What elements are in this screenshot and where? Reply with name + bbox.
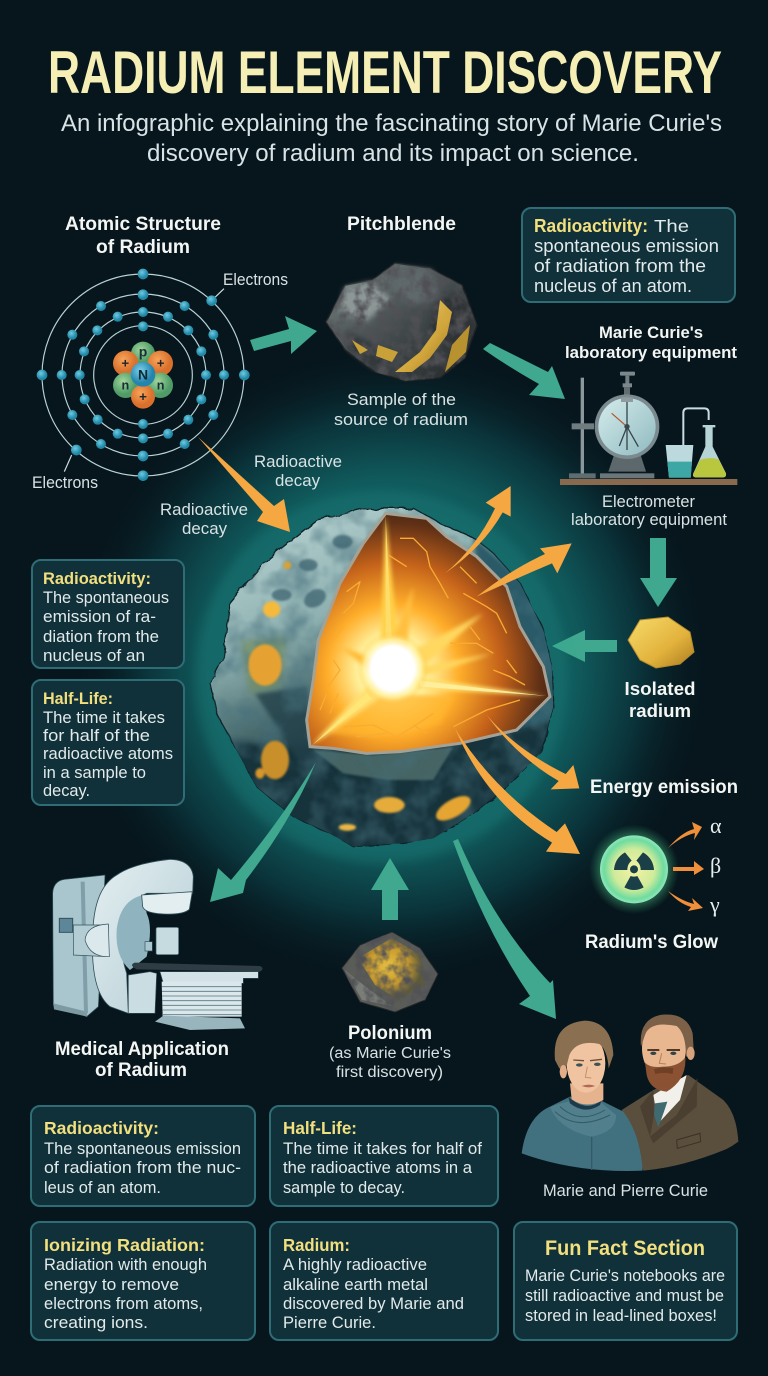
panel: radium definition (270, 1222, 498, 1340)
panel: half-life left: Half-Life: (43, 690, 113, 708)
arrow: lab to isolated radium (640, 538, 677, 607)
label: polonium: (as Marie Curie's (329, 1045, 451, 1062)
label: polonium: first discovery) (336, 1064, 443, 1081)
panel: ionizing radiation: creating ions. (44, 1314, 148, 1332)
panel: radioactivity top right: nucleus of an atom. (534, 276, 692, 296)
label: radium's glow: Radium's Glow (585, 932, 718, 953)
panel: radioactivity left: The spontaneous (43, 589, 169, 607)
arrow: pitchblende to lab (483, 343, 565, 399)
label: energy emission: Energy emission (590, 777, 738, 798)
panel: radium definition: discovered by Marie and (283, 1295, 464, 1313)
label: electrons lower: Electrons (32, 474, 98, 492)
panel: radioactivity top right: of radiation from the (534, 256, 706, 276)
panel: ionizing radiation: Ionizing Radiation: (44, 1235, 205, 1255)
heading: atomic structure: of Radium (96, 237, 190, 258)
panel: radioactivity top right: spontaneous emission (534, 236, 719, 256)
rock body (210, 508, 553, 847)
lava cracks (320, 538, 525, 737)
nucleus: p (139, 344, 147, 360)
caption: marie and pierre curie: Marie and Pierre Curie (543, 1182, 708, 1200)
heading: lab equipment: Marie Curie's (599, 323, 703, 342)
caption: electrometer: Electrometer (602, 493, 696, 511)
icon: pitchblende rock (326, 263, 477, 381)
panel: fun fact: still radioactive and must be (525, 1287, 724, 1305)
cut face (307, 513, 550, 753)
heading: medical application: of Radium (95, 1060, 187, 1081)
label: isolated radium: radium (629, 701, 691, 721)
arrow: rock to medical (210, 762, 316, 902)
pits on rock surface (272, 535, 353, 611)
panel: ionizing radiation: electrons from atoms, (44, 1295, 203, 1313)
panel: radium definition: Pierre Curie. (283, 1314, 376, 1332)
panel: fun fact: stored in lead-lined boxes! (525, 1307, 717, 1325)
panel: radium definition: alkaline earth metal (283, 1276, 428, 1294)
nucleus (113, 342, 173, 409)
panel: radium definition: A highly radioactive (283, 1256, 427, 1274)
label: alpha: α (710, 813, 722, 838)
electrons (37, 269, 250, 481)
panel: half-life bottom: the radioactive atoms in a (283, 1159, 473, 1177)
label: radioactive decay lower: decay (182, 520, 228, 538)
panel: radioactivity left: diation from the (43, 628, 159, 646)
icon: isolated radium nugget (628, 617, 694, 668)
arrow: atom to pitchblende (250, 316, 317, 354)
panel: fun fact: Fun Fact Section (545, 1237, 705, 1260)
caption: pitchblende: Sample of the (347, 391, 456, 409)
label: polonium: Polonium (348, 1023, 432, 1044)
panel: half-life bottom: The time it takes for half of (283, 1140, 482, 1158)
panel: radioactivity bottom (31, 1106, 255, 1206)
caption: pitchblende (334, 391, 468, 429)
icon: radium glow orb (589, 824, 679, 914)
arrow: rock to curies (453, 839, 556, 1019)
label: radioactive decay lower (160, 501, 248, 538)
panel: half-life left: for half of the (43, 727, 150, 745)
nucleus: n (157, 378, 165, 392)
label: polonium (329, 1023, 451, 1081)
icon: polonium rock (342, 932, 438, 1012)
panel: half-life bottom (270, 1106, 498, 1206)
nucleus: + (121, 356, 129, 371)
panel: ionizing radiation: Radiation with enough (44, 1256, 207, 1274)
panel: radioactivity bottom: Radioactivity: (44, 1118, 159, 1138)
panel: half-life left: decay. (43, 782, 90, 800)
heading: pitchblende: Pitchblende (347, 214, 456, 235)
label: beta: β (710, 853, 721, 878)
arrows: alpha beta gamma (668, 822, 704, 911)
subtitle (61, 110, 722, 167)
panel: radioactivity left (32, 560, 184, 668)
nucleus: n (121, 378, 129, 392)
heading: atomic structure: Atomic Structure (65, 214, 221, 235)
panel: half-life bottom: Half-Life: (283, 1118, 357, 1138)
caption: electrometer: laboratory equipment (571, 511, 727, 529)
marie (522, 1021, 643, 1171)
panel: radium definition: Radium: (283, 1235, 350, 1255)
panel: radioactivity bottom: The spontaneous emission (44, 1140, 241, 1158)
label: radioactive decay upper: decay (275, 472, 321, 490)
panel: fun fact: Marie Curie's notebooks are (525, 1267, 725, 1285)
label: isolated radium (624, 679, 696, 721)
panel: radioactivity top right: Radioactivity: (534, 216, 648, 236)
nucleus: + (157, 356, 165, 371)
panel: radioactivity top right: The (654, 216, 689, 236)
caption: pitchblende: source of radium (334, 411, 468, 429)
panel: fun fact (514, 1222, 737, 1340)
panel: radioactivity bottom: of radiation from the nuc- (44, 1159, 241, 1177)
caption: electrometer (571, 493, 727, 529)
nucleus: + (139, 389, 147, 404)
pierre (622, 1015, 738, 1171)
panel: ionizing radiation: energy to remove (44, 1276, 179, 1294)
panel: radioactivity left: Radioactivity: (43, 570, 151, 588)
arrows: orange radiation from rock (445, 486, 580, 854)
arrow: polonium to rock (371, 858, 409, 920)
arrow: atom decay into rock (198, 437, 290, 532)
label: radioactive decay lower: Radioactive (160, 501, 248, 519)
illustration: marie and pierre curie portrait (517, 1015, 743, 1187)
label: radioactive decay upper: Radioactive (254, 453, 342, 471)
panel: radioactivity bottom: leus of an atom. (44, 1179, 161, 1197)
label: radioactive decay upper (254, 453, 342, 490)
panel: ionizing radiation (31, 1222, 255, 1340)
arrow: radium to rock (552, 630, 617, 662)
panel: radioactivity top right (522, 208, 735, 302)
nucleus: N (138, 366, 148, 382)
heading: atomic structure (65, 214, 221, 258)
heading: lab equipment (565, 323, 737, 362)
illustration: laboratory equipment (560, 372, 737, 485)
heading: medical application: Medical Application (55, 1039, 229, 1060)
panel: radioactivity left: nucleus of an (43, 647, 145, 665)
subtitle: An infographic explaining the fascinating story of Marie Curie's (61, 110, 722, 137)
panel: half-life left: The time it takes (43, 709, 165, 727)
panel: half-life left: in a sample to (43, 764, 146, 782)
diagram: radium atom (37, 269, 250, 481)
heading: lab equipment: laboratory equipment (565, 343, 737, 362)
central teal glow (40, 320, 750, 1010)
label: gamma: γ (709, 892, 720, 917)
panel: half-life left (32, 680, 184, 805)
label: isolated radium: Isolated (624, 679, 696, 699)
panel: radioactivity left: emission of ra- (43, 608, 156, 626)
heading: medical application (55, 1039, 229, 1081)
glowing ore spots (248, 561, 474, 831)
panel: half-life left: radioactive atoms (43, 745, 173, 763)
panel: half-life bottom: sample to decay. (283, 1179, 405, 1197)
illustration: medical machine (53, 859, 262, 1030)
illustration: radium rock cross-section (195, 490, 568, 863)
subtitle: discovery of radium and its impact on science. (147, 140, 639, 167)
label: electrons upper: Electrons (223, 271, 288, 289)
